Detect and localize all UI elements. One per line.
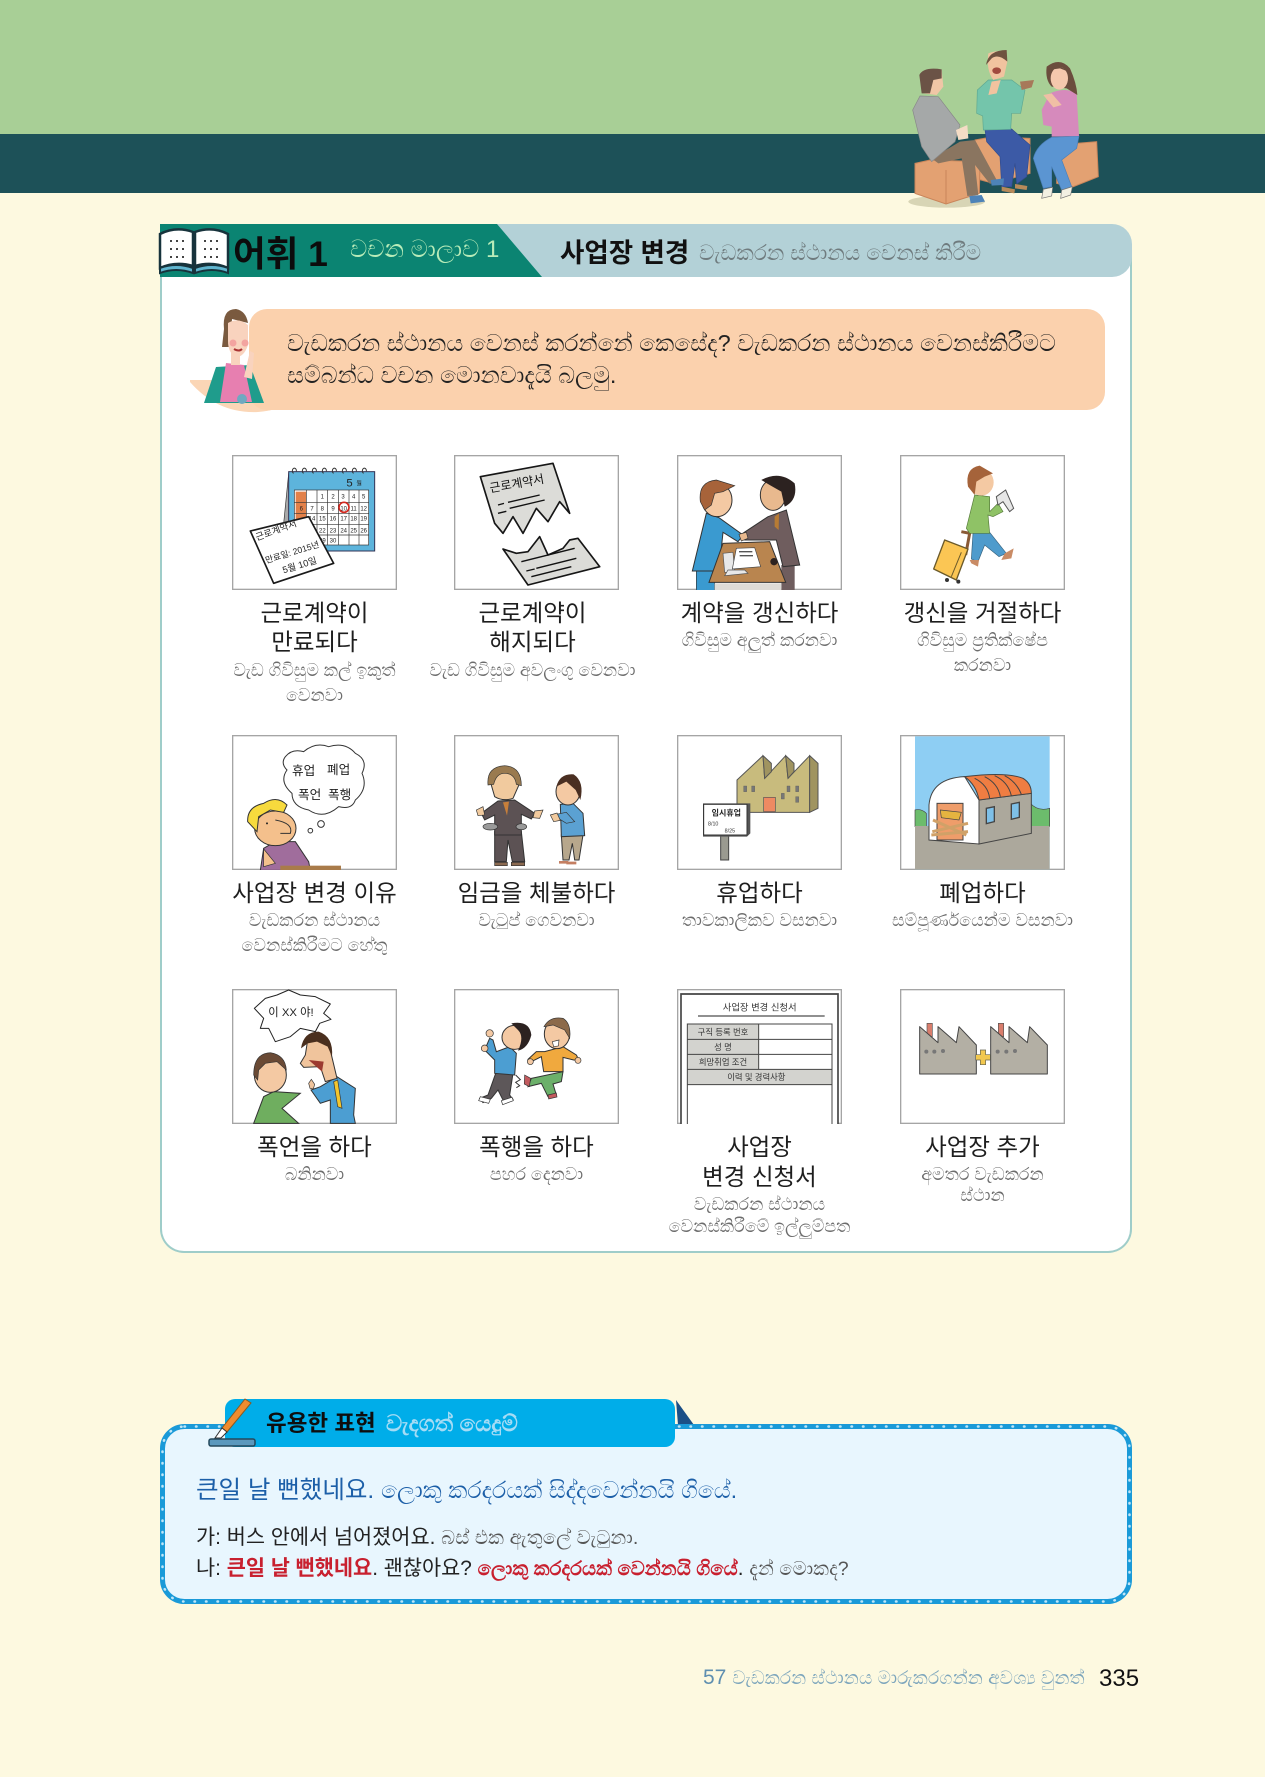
icon: paintbrush (208, 1398, 256, 1447)
dialogue line A: 가: 버스 안에서 넘어졌어요. බස් එක ඇතුලේ වැටුනා. (196, 1526, 638, 1549)
illustration: factory with notice sign: 8/25 (725, 828, 735, 834)
translation: වැඩකරන ස්ථානය (249, 910, 380, 930)
header: vocabulary 1 Sinhala: වචන මාලාව 1 (350, 236, 499, 263)
illustration: handshake at a table (677, 455, 842, 590)
illustration: calendar and contract: 근로계약서 (254, 518, 298, 543)
section header bar (160, 224, 1132, 277)
bubble tail (190, 380, 271, 412)
translation: බනිනවා (285, 1164, 344, 1184)
illustration: change-of-workplace application form: 이력 및 경력사항 (727, 1072, 786, 1082)
illustration: calendar and contract: 26 (360, 528, 368, 534)
translation: පහර දෙනවා (490, 1164, 583, 1184)
illustration: calendar and contract: 19 (360, 516, 368, 522)
dark banner stripe (0, 134, 1265, 193)
illustration: calendar and contract: 12 (360, 506, 368, 512)
item: renew contract (677, 455, 842, 653)
bubble text (287, 330, 1056, 390)
illustration: calendar and contract: 24 (340, 528, 348, 534)
illustration: change-of-workplace application form: 사업장 변경 신청서 (723, 1002, 797, 1013)
illustration: man yelling at worker: 이 XX 야! (268, 1006, 314, 1019)
illustration: boarded-up building (900, 735, 1065, 870)
label line 2: 만료되다 (271, 629, 358, 655)
panel frame with dotted border (160, 1400, 1132, 1604)
illustration: calendar and contract: 15 (319, 516, 326, 522)
translation: තාවකාලිකව වසනවා (682, 910, 837, 930)
panel: useful expressions (160, 1398, 1132, 1604)
illustration: calendar and contract: 만료일: 2015년 (264, 539, 320, 565)
illustration: calendar and contract: 30 (330, 538, 337, 544)
label: 휴업하다 (716, 880, 803, 906)
item: additional workplace (900, 989, 1065, 1205)
illustration: calendar and contract: 25 (350, 528, 358, 534)
illustration: calendar and contract: 9 (331, 506, 335, 512)
label line 2: 변경 신청서 (702, 1164, 817, 1190)
illustration: thinking man: 폭언 (298, 788, 321, 802)
header: vocabulary 1: 어휘 1 (233, 234, 328, 274)
header: topic Sinhala: වැඩකරන ස්ථානය වෙනස් කිරීම (699, 241, 981, 265)
illustration: calendar and contract: 18 (350, 516, 358, 522)
bubble text: වැඩකරන ස්ථානය වෙනස් කරන්නේ කෙසේද? වැඩකරන ස්ථානය වෙනස්කිරීමට (287, 330, 1056, 356)
bubble text: සම්බන්ධ වචන මොනවාදැයි බලමු. (287, 362, 616, 388)
footer: chapter title: 57 වැඩකරන ස්ථානය මාරුකරගන්න අවශ්‍ය වුනත් (703, 1666, 1085, 1689)
translation: වැඩ ගිවිසුම අවලංගු වෙනවා (429, 660, 636, 680)
translation: වැඩ ගිවිසුම කල් ඉකුත් (233, 660, 396, 680)
item: reasons for change (232, 735, 397, 955)
item: contract terminated (429, 455, 636, 682)
panel: vocabulary (160, 250, 1132, 1253)
illustration: change-of-workplace application form: 성 명 (714, 1042, 732, 1052)
illustration: two factories with plus (900, 989, 1065, 1124)
icon: open book (158, 228, 230, 274)
illustration: calendar and contract: 5 (346, 477, 353, 489)
item: refuse renewal (900, 455, 1065, 675)
top banner (0, 0, 1265, 193)
label: 갱신을 거절하다 (904, 600, 1061, 626)
tab title Sinhala: වැදගත් යෙදුම් (386, 1410, 518, 1436)
header: topic title: 사업장 변경 (560, 238, 689, 268)
illustration: factory with notice sign: 8/10 (708, 822, 718, 828)
dialogue line B: 나: 큰일 날 뻔했네요. 괜찮아요? ලොකු කරදරයක් වෙන්නයි ගියේ. දැන් මොකද? (196, 1557, 849, 1580)
label: 근로계약이 (260, 600, 369, 626)
illustration: man yelling at worker (232, 989, 397, 1124)
item: contract expires (232, 455, 397, 705)
label: 폭행을 하다 (479, 1134, 594, 1160)
woman (1033, 136, 1079, 190)
illustration: calendar and contract: 14 (309, 516, 316, 522)
illustration: factory with notice sign: 임시휴업 (712, 808, 741, 818)
illustration: calendar and contract: 4 (352, 494, 356, 500)
footer: page number: 335 (1099, 1665, 1139, 1692)
translation line 2: ස්ථාන (960, 1185, 1005, 1205)
illustration: thinking man: 폭행 (328, 787, 351, 802)
illustration: torn contract: 근로계약서 (488, 471, 545, 495)
label line 2: 해지되다 (489, 629, 576, 655)
illustration: thinking man (232, 735, 397, 870)
middle man (985, 129, 1030, 187)
item: verbal abuse (232, 989, 397, 1184)
tab title: 유용한 표현 (266, 1411, 376, 1436)
illustration: calendar and contract: 29 (319, 538, 326, 544)
left man (932, 140, 997, 196)
icon: teacher (204, 309, 264, 404)
illustration: calendar and contract: 8 (321, 506, 325, 512)
illustration: calendar and contract: 3 (341, 494, 345, 500)
translation: වැඩකරන ස්ථානය (694, 1194, 825, 1214)
label: 계약을 갱신하다 (681, 600, 838, 626)
item: application form (669, 989, 850, 1239)
illustration: change-of-workplace application form (677, 989, 842, 1124)
label: 근로계약이 (478, 600, 587, 626)
key expression: 큰일 날 뻔했네요. ලොකු කරදරයක් සිද්දවෙන්නයි ගියේ. (196, 1477, 737, 1504)
label: 임금을 체불하다 (458, 880, 615, 906)
illustration: calendar and contract: 22 (319, 528, 326, 534)
label: 사업장 (727, 1134, 792, 1160)
speech bubble with teacher (190, 309, 1105, 412)
header teal tab (160, 224, 542, 277)
illustration: calendar and contract: 17 (340, 516, 348, 522)
item: permanent closure (892, 735, 1073, 932)
illustration: calendar and contract: 월 (356, 480, 362, 488)
translation: ගිවිසුම අලුත් කරනවා (682, 630, 837, 650)
illustration: thinking man: 폐업 (327, 763, 350, 777)
item: physical violence (454, 989, 619, 1185)
illustration: torn contract (454, 455, 619, 590)
illustration: calendar and contract: 1 (321, 494, 325, 500)
label: 폐업하다 (939, 880, 1026, 906)
illustration: change-of-workplace application form: 희망취업 조건 (699, 1057, 747, 1067)
illustration: boss with empty pockets and worker (454, 735, 619, 870)
label: 사업장 변경 이유 (232, 880, 397, 906)
label: 사업장 추가 (925, 1134, 1040, 1160)
illustration: two men fighting (454, 989, 619, 1124)
translation: වැටුප් ගෙවනවා (478, 910, 595, 930)
translation line 2: වෙනවා (286, 685, 343, 705)
translation: ගිවිසුම ප්‍රතික්ෂේප (917, 630, 1048, 650)
illustration: calendar and contract: 11 (351, 506, 357, 512)
translation: අමතර වැඩකරන (921, 1164, 1044, 1184)
illustration: calendar and contract: 16 (330, 516, 337, 522)
illustration: calendar and contract: 7 (310, 506, 314, 512)
label: 폭언을 하다 (257, 1134, 372, 1160)
illustration: calendar and contract: 2 (331, 494, 335, 500)
illustration: calendar and contract: 6 (300, 506, 304, 512)
illustration: calendar and contract: 10 (340, 506, 348, 512)
illustration: calendar and contract (232, 455, 397, 590)
illustration: calendar and contract: 5월 10일 (281, 554, 318, 575)
illustration: calendar and contract: 5 (362, 494, 366, 500)
item: temporary closure (677, 735, 842, 931)
illustration: three people sitting and talking (908, 50, 1099, 208)
translation line 2: කරනවා (954, 655, 1011, 675)
tab (225, 1399, 675, 1447)
illustration: man leaving with suitcase (900, 455, 1065, 590)
item: unpaid wages (454, 735, 619, 930)
translation line 2: වෙනස්කිරීමේ ඉල්ලුම්පත (669, 1216, 850, 1236)
illustration: thinking man: 휴업 (292, 764, 315, 778)
translation: සම්පූර්ණයෙන්ම වසනවා (892, 910, 1073, 930)
illustration: calendar and contract: 23 (330, 528, 337, 534)
illustration: factory with notice sign (677, 735, 842, 870)
translation line 2: වෙනස්කිරීමට හේතු (242, 935, 388, 955)
illustration: change-of-workplace application form: 구직 등록 번호 (698, 1027, 749, 1037)
bubble (249, 309, 1105, 410)
